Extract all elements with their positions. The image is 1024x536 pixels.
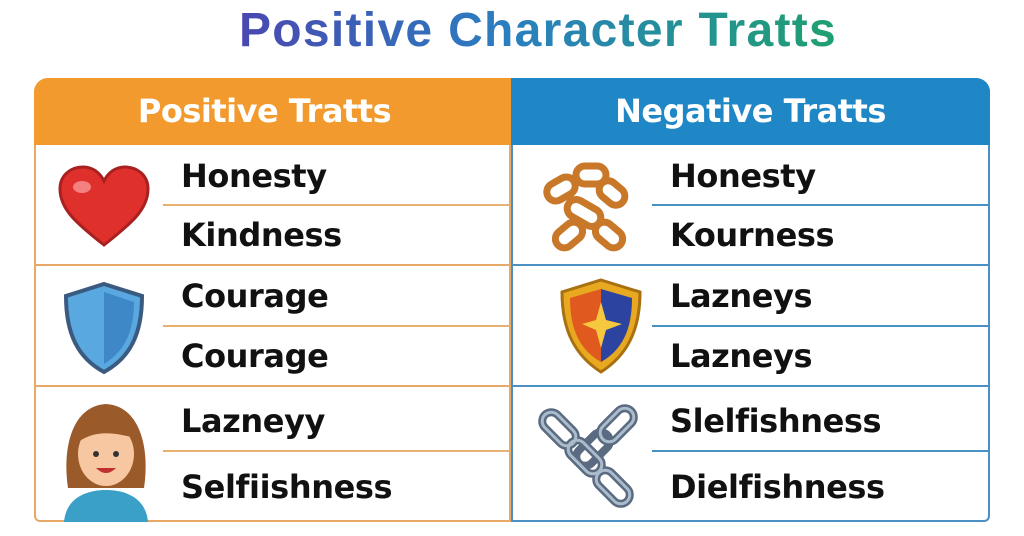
text: right list: Slelfishness bbox=[670, 402, 881, 440]
header: positive: Positive Tratts bbox=[138, 92, 391, 130]
title: Positive Character Tratts bbox=[239, 4, 837, 57]
left column panel bbox=[34, 78, 511, 522]
text: left list: Selfiishness bbox=[181, 468, 392, 506]
icon: broken chain bbox=[543, 162, 628, 252]
icon: shield bbox=[64, 282, 144, 374]
icon: girl bbox=[64, 404, 148, 522]
text: left list: Honesty bbox=[181, 157, 327, 195]
text: left list bbox=[181, 157, 392, 506]
icon: heart bbox=[58, 166, 150, 247]
text: right list: Honesty bbox=[670, 157, 816, 195]
header: positive bbox=[34, 78, 511, 145]
text: left list: Courage bbox=[181, 277, 328, 315]
header: negative: Negative Tratts bbox=[615, 92, 886, 130]
text: right list: Lazneys bbox=[670, 277, 812, 315]
table bbox=[34, 78, 990, 522]
icon: chain bbox=[538, 404, 638, 508]
text: left list: Courage bbox=[181, 337, 328, 375]
text: left list: Lazneyy bbox=[181, 402, 325, 440]
header: negative bbox=[511, 78, 990, 145]
text: right list: Kourness bbox=[670, 216, 834, 254]
text: right list: Lazneys bbox=[670, 337, 812, 375]
icon: shield star bbox=[560, 278, 642, 374]
text: right list bbox=[670, 157, 885, 506]
text: left list: Kindness bbox=[181, 216, 342, 254]
right column panel bbox=[511, 78, 990, 522]
text: right list: Dielfishness bbox=[670, 468, 885, 506]
